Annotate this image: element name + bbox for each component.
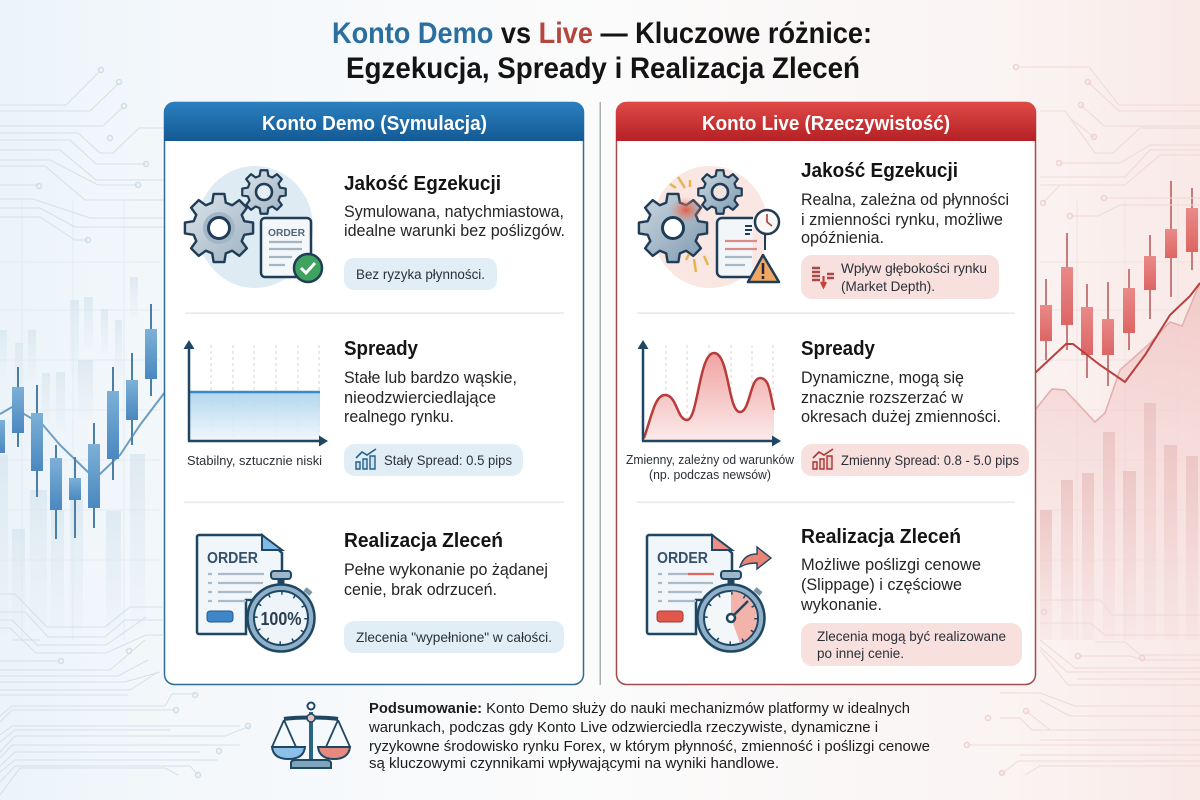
- badge: market depth: (Market Depth).: [841, 278, 935, 294]
- section: execution quality (demo): Jakość Egzekucji: [344, 173, 501, 195]
- badge: different price: po innej cenie.: [817, 645, 904, 661]
- panel: Konto Live: [616, 102, 1036, 684]
- section: spreads (demo): [344, 338, 523, 476]
- chart: stable spread: [184, 340, 328, 468]
- icon: market depth: [812, 268, 834, 287]
- badge: fully filled: [344, 621, 564, 653]
- icon: order with stopwatch and slippage arrow: [647, 535, 771, 652]
- badge: fixed spread: Stały Spread: 0.5 pips: [384, 452, 512, 468]
- icon: small bars and trend: [356, 449, 376, 469]
- badge: variable spread: Zmienny Spread: 0.8 - 5.0 pips: [841, 452, 1019, 468]
- section: order fill (demo): [344, 530, 564, 653]
- summary text: Podsumowanie: Konto Demo służy do nauki mechanizmów platformy w idealnych: [369, 701, 910, 717]
- section: order fill (live): [800, 526, 1022, 666]
- icon: gears and order with check: [185, 166, 322, 288]
- section: execution quality (demo): idealne warunki bez poślizgów.: [344, 222, 565, 240]
- chart: variable spread: Zmienny, zależny od warunków: [626, 452, 795, 467]
- section: order fill (demo): cenie, brak odrzuceń.: [344, 581, 497, 599]
- section: spreads (live): Spready: [801, 338, 876, 360]
- demo panel header: [164, 102, 584, 141]
- badge: fully filled: Zlecenia "wypełnione" w całości.: [356, 629, 552, 645]
- section: execution quality (live): Jakość Egzekucji: [801, 160, 958, 182]
- section: order fill (demo): Realizacja Zleceń: [344, 530, 503, 552]
- live panel header: Konto Live (Rzeczywistość): [702, 113, 950, 135]
- section: execution quality (live): Realna, zależna od płynności: [801, 191, 1009, 209]
- icon: gears and order with check: ORDER: [268, 227, 305, 239]
- icon: stressed gears, order, clock and warning: [639, 166, 779, 288]
- badge: different price: Zlecenia mogą być realizowane: [817, 628, 1006, 644]
- section: execution quality (live): i zmienności rynku, możliwe: [801, 211, 1003, 229]
- section: spreads (live): okresach dużej zmienności.: [801, 408, 1001, 426]
- icon: order with 100% stopwatch: [197, 535, 314, 652]
- section: order fill (live): Realizacja Zleceń: [801, 526, 961, 548]
- panel: Konto Demo: [164, 102, 584, 684]
- section: order fill (live): wykonanie.: [800, 596, 882, 614]
- section: execution quality (demo): [344, 173, 565, 290]
- live panel header: [616, 102, 1036, 141]
- section: order fill (live): Możliwe poślizgi cenowe: [801, 556, 981, 574]
- section: execution quality (demo): Symulowana, natychmiastowa,: [344, 203, 564, 221]
- summary text: warunkach, podczas gdy Konto Live odzwierciedla rzeczywiste, dynamiczne i: [368, 720, 878, 736]
- section: spreads (demo): realnego rynku.: [344, 408, 454, 426]
- icon: order with stopwatch and slippage arrow: ORDER: [657, 550, 708, 567]
- badge: market depth: Wpływ głębokości rynku: [841, 260, 987, 276]
- icon: order with 100% stopwatch: 100%: [260, 609, 302, 629]
- badge: no liquidity risk: Bez ryzyka płynności.: [356, 266, 485, 282]
- chart: stable spread: Stabilny, sztucznie niski: [187, 453, 322, 468]
- background: blue market chart: [0, 200, 165, 640]
- demo panel header: Konto Demo (Symulacja): [262, 113, 487, 135]
- title: Egzekucja, Spready i Realizacja Zleceń: [346, 52, 860, 85]
- section: spreads (live): znacznie rozszerzać w: [801, 389, 963, 407]
- summary text: [368, 701, 930, 772]
- section: spreads (demo): nieodzwierciedlające: [344, 389, 496, 407]
- section: spreads (demo): Stałe lub bardzo wąskie,: [344, 369, 517, 387]
- icon: balance scale: [272, 702, 350, 768]
- chart: variable spread: [626, 340, 795, 482]
- section: spreads (live): Dynamiczne, mogą się: [801, 369, 964, 387]
- background: red market chart: [1035, 181, 1200, 640]
- icon: order with 100% stopwatch: ORDER: [207, 550, 258, 567]
- summary text: są kluczowymi czynnikami wpływającymi na wyniki handlowe.: [369, 756, 779, 772]
- summary text: ryzykowne środowisko rynku Forex, w którym płynność, zmienność i poślizgi cenowe: [369, 739, 930, 755]
- title: [332, 17, 872, 85]
- badge: market depth: [801, 255, 999, 299]
- center divider: [600, 102, 601, 685]
- section: order fill (demo): Pełne wykonanie po żądanej: [344, 561, 548, 579]
- badge: no liquidity risk: [344, 258, 497, 290]
- badge: fixed spread: [344, 444, 523, 476]
- background: red circuit traces: [964, 64, 1200, 776]
- background: blue circuit traces: [0, 68, 250, 795]
- chart: variable spread: (np. podczas newsów): [649, 467, 771, 482]
- badge: variable spread: [801, 444, 1029, 476]
- section: order fill (live): (Slippage) i częściowe: [801, 576, 962, 594]
- section: execution quality (live): [801, 160, 1009, 299]
- section: spreads (demo): Spready: [344, 338, 419, 360]
- badge: different price: [801, 623, 1022, 666]
- section: execution quality (live): opóźnienia.: [801, 229, 884, 247]
- title: Konto Demo vs Live — Kluczowe różnice:: [332, 17, 872, 50]
- icon: small red bars and trend: [813, 449, 833, 469]
- section: spreads (live): [801, 338, 1029, 476]
